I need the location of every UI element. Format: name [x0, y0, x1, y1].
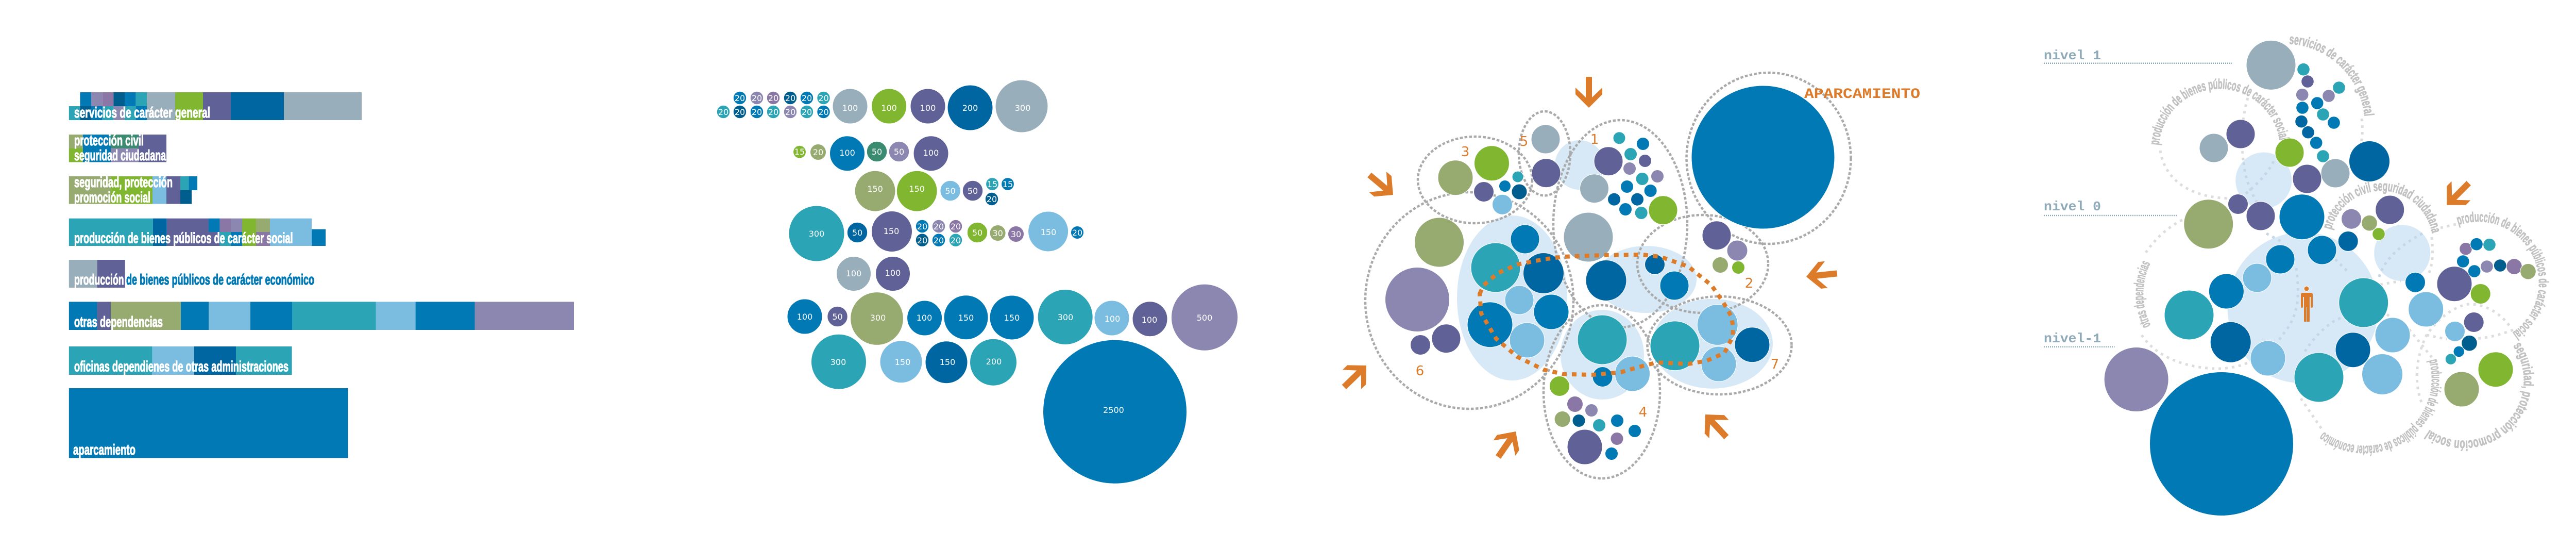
- bar: producción de bienes públicos de carácter social: producción de bienes públicos de carácter social: [74, 230, 293, 247]
- bubble row: oficinas dependientes de otras administraciones: 300: [831, 357, 846, 367]
- bubble row: oficinas dependientes de otras administraciones: 150: [895, 357, 910, 367]
- group numbers: 5: [1520, 134, 1528, 150]
- bubble row: servicios de carácter general: [717, 80, 1048, 132]
- arrow: top: [1575, 77, 1602, 108]
- bubble row: otras dependencias: 50: [832, 312, 843, 322]
- bubble row: seguridad, protección, promoción social: 15: [987, 179, 997, 189]
- bar: seguridad, protección y promoción social: seguridad, protección: [74, 174, 173, 191]
- bubble row: otras dependencias: 100: [917, 313, 932, 323]
- bar: seguridad, protección y promoción social: promoción social: [74, 190, 150, 206]
- group numbers: 6: [1416, 363, 1424, 379]
- bar: producción de bienes públicos de carácter económico: [69, 260, 314, 288]
- bubble row: servicios de carácter general: 100: [881, 103, 897, 113]
- bubble row: producción de bienes públicos de carácter social: 20: [934, 222, 944, 231]
- level label: nivel 0: nivel 0: [2044, 199, 2101, 214]
- bubbles: level -1: [2104, 347, 2294, 516]
- group 4 bubbles: [1550, 315, 1650, 464]
- orange dashed central loop: [1480, 255, 1733, 375]
- bubble row: servicios de carácter general: 20: [718, 107, 728, 117]
- bar: aparcamiento: [69, 388, 348, 458]
- bar: protección civil y seguridad ciudadana: [69, 132, 166, 164]
- bubble: aparcamiento 2500: [1043, 340, 1187, 484]
- bubble row: servicios de carácter general: 20: [818, 93, 829, 103]
- bubble row: protección civil, seguridad ciudadana: 100: [923, 148, 939, 158]
- bar: oficinas dependientes de otras administraciones: oficinas dependienes de otras administraciones: [74, 359, 289, 375]
- bubble row: producción de bienes públicos de carácter social: [789, 206, 1084, 261]
- bubble row: otras dependencias: 100: [1142, 315, 1157, 325]
- group 2 bubbles: [1645, 221, 1748, 300]
- bar: seguridad, protección y promoción social: [69, 174, 197, 206]
- panel: bubble diagram by floor level: [2044, 36, 2549, 516]
- bubble row: otras dependencias: 500: [1197, 313, 1212, 323]
- panel: bubble rows with surface values: [717, 80, 1238, 484]
- group numbers: 1: [1590, 132, 1599, 147]
- bubble row: otras dependencias: 100: [797, 312, 812, 322]
- bar: servicios de carácter general: servicios de carácter general: [74, 105, 210, 121]
- bubble row: servicios de carácter general: 20: [785, 93, 795, 103]
- bar: producción de bienes públicos de carácter social: [69, 219, 326, 247]
- bubble row: servicios de carácter general: 20: [768, 93, 778, 103]
- bar: aparcamiento: aparcamiento: [73, 442, 135, 458]
- arrow: upper left: [1361, 165, 1402, 205]
- curved category labels: servicios de carácter general: [2290, 36, 2375, 116]
- panel: stacked area bars by category: [69, 92, 574, 458]
- panel: cluster map with numbered groups: [1335, 73, 1920, 478]
- bubble row: seguridad, protección, promoción social: 150: [867, 184, 883, 194]
- bubble row: producción de bienes públicos de carácter social: 30: [992, 228, 1003, 238]
- level label: nivel -1: nivel-1: [2044, 331, 2101, 346]
- bubble row: producción de bienes públicos de carácter social: 150: [1041, 227, 1056, 237]
- bubble row: producción de bienes públicos de carácter social: 150: [884, 226, 899, 236]
- dashed group outlines: [1365, 73, 1851, 478]
- bubble row: servicios de carácter general: 20: [802, 107, 812, 117]
- bubble row: producción de bienes públicos de carácter social: 20: [951, 236, 961, 245]
- bar: producción de bienes públicos de carácter económico: producción: [74, 272, 124, 288]
- group numbers: 4: [1639, 405, 1647, 420]
- bubble row: producción de bienes públicos de carácter social: 30: [1011, 229, 1021, 239]
- arrow: bottom: [1487, 424, 1527, 464]
- bubble row: servicios de carácter general: 20: [752, 107, 762, 117]
- bubble row: producción de bienes públicos de carácter social: 20: [1072, 228, 1082, 238]
- bar: otras dependencias: otras dependencias: [74, 314, 163, 330]
- bubble row: producción de bienes públicos de carácter social: 20: [917, 222, 927, 231]
- group 3 bubbles: [1438, 146, 1527, 214]
- bubble row: oficinas dependientes de otras administraciones: 150: [940, 357, 955, 367]
- bubble row: servicios de carácter general: 20: [752, 93, 762, 103]
- bubble row: servicios de carácter general: 100: [920, 103, 936, 113]
- curved category labels: producción de bienes públicos de carácter social: [2456, 211, 2549, 341]
- bar: oficinas dependientes de otras administraciones: [69, 346, 292, 375]
- bubble row: producción de bienes públicos de carácter económico: 100: [846, 269, 861, 278]
- pale area circles: [2227, 152, 2431, 384]
- bubble row: producción de bienes públicos de carácter social: 300: [809, 229, 824, 239]
- bar: producción de bienes públicos de carácter económico: de bienes públicos de carácter económico: [126, 272, 314, 288]
- bubble row: producción de bienes públicos de carácter social: 20: [934, 236, 944, 245]
- bar: otras dependencias: [69, 302, 574, 330]
- bubble row: seguridad, protección, promoción social: 150: [909, 184, 925, 194]
- bubble row: servicios de carácter general: 20: [735, 107, 745, 117]
- group 1 bubbles: [1564, 132, 1677, 301]
- label: aparcamiento: APARCAMIENTO: [1804, 87, 1920, 103]
- bar: protección civil y seguridad ciudadana: protección civil: [74, 132, 144, 149]
- bubble row: otras dependencias: [787, 284, 1238, 351]
- bubble row: seguridad, protección, promoción social: 50: [968, 186, 978, 196]
- bubble row: seguridad, protección, promoción social: [855, 171, 1014, 211]
- bubble row: otras dependencias: 100: [1105, 314, 1120, 324]
- bubble row: otras dependencias: 300: [1058, 312, 1073, 322]
- bubbles: right cluster: [2437, 238, 2536, 407]
- bubble row: servicios de carácter general: 300: [1015, 103, 1030, 113]
- pale area shapes: [1457, 140, 1773, 400]
- curved category labels: producción de bienes públicos de carácter social: [2151, 78, 2290, 145]
- arrow: lower left: [1335, 356, 1376, 396]
- bubble row: otras dependencias: 150: [958, 313, 974, 323]
- curved category labels: otras dependencias: [2133, 261, 2150, 328]
- bubble row: producción de bienes públicos de carácter social: 50: [852, 228, 862, 238]
- bubble: aparcamiento 2500: 2500: [1103, 405, 1124, 415]
- bubble row: protección civil, seguridad ciudadana: 50: [872, 147, 882, 157]
- bubble row: producción de bienes públicos de carácter económico: 100: [885, 268, 901, 278]
- bubble row: producción de bienes públicos de carácter económico: [837, 257, 910, 291]
- bubble row: otras dependencias: 150: [1004, 313, 1020, 323]
- level label: nivel 1: nivel 1: [2044, 48, 2101, 63]
- group 7 bubbles: [1650, 304, 1770, 381]
- arrow: bottom right: [1696, 405, 1736, 446]
- bubbles: level 0 centre: [2164, 194, 2444, 402]
- bubble row: otras dependencias: 300: [870, 313, 886, 323]
- bubble row: oficinas dependientes de otras administraciones: 200: [986, 357, 1002, 367]
- arrow: right: [1805, 260, 1838, 290]
- bubble row: servicios de carácter general: 200: [962, 103, 978, 113]
- bubble row: protección civil, seguridad ciudadana: [793, 136, 948, 171]
- bubble row: servicios de carácter general: 20: [768, 107, 778, 117]
- bar: servicios de carácter general: [69, 92, 362, 121]
- icon: orange human figure for scale: [2301, 286, 2313, 322]
- group 5 bubbles: [1531, 125, 1561, 188]
- bubble row: protección civil, seguridad ciudadana: 50: [894, 147, 904, 157]
- bubble row: seguridad, protección, promoción social: 15: [1003, 179, 1013, 189]
- bubble row: producción de bienes públicos de carácter social: 20: [951, 222, 961, 231]
- group numbers: 7: [1771, 357, 1779, 372]
- bubble: aparcamiento: [1691, 86, 1835, 229]
- bubble row: servicios de carácter general: 20: [818, 107, 829, 117]
- bubble row: seguridad, protección, promoción social: 20: [987, 194, 997, 204]
- group numbers: 3: [1461, 144, 1469, 160]
- group numbers: 2: [1745, 276, 1753, 291]
- bubble row: servicios de carácter general: 100: [842, 103, 858, 113]
- curved category labels: [2133, 36, 2549, 456]
- bubble row: seguridad, protección, promoción social: 50: [945, 186, 956, 196]
- bubble row: producción de bienes públicos de carácter social: 50: [972, 228, 982, 238]
- dashed connecting arcs: [2142, 98, 2513, 429]
- bubble row: protección civil, seguridad ciudadana: 100: [839, 148, 855, 158]
- bubble row: servicios de carácter general: 20: [735, 93, 745, 103]
- curved category labels: producción de bienes públicos de carácter económico: [2320, 359, 2442, 456]
- bubble row: oficinas dependientes de otras administraciones: [811, 334, 1017, 389]
- bubbles: level 1 services: [2199, 40, 2389, 193]
- group numbers: [1416, 132, 1779, 420]
- curved category labels: seguridad, protección promoción social: [2424, 342, 2534, 451]
- bar: protección civil y seguridad ciudadana: seguridad ciudadana: [74, 147, 166, 164]
- group 6 bubbles: [1385, 218, 1569, 358]
- bubble row: protección civil, seguridad ciudadana: 20: [813, 147, 823, 157]
- bubble row: producción de bienes públicos de carácter social: 20: [917, 236, 927, 245]
- arrow: upper right: [2437, 174, 2478, 214]
- curved category labels: protección civil seguridad ciudadana: [2324, 182, 2439, 234]
- bubble row: protección civil, seguridad ciudadana: 15: [794, 147, 805, 157]
- bubble row: servicios de carácter general: 20: [802, 93, 812, 103]
- bubble row: servicios de carácter general: 20: [785, 107, 795, 117]
